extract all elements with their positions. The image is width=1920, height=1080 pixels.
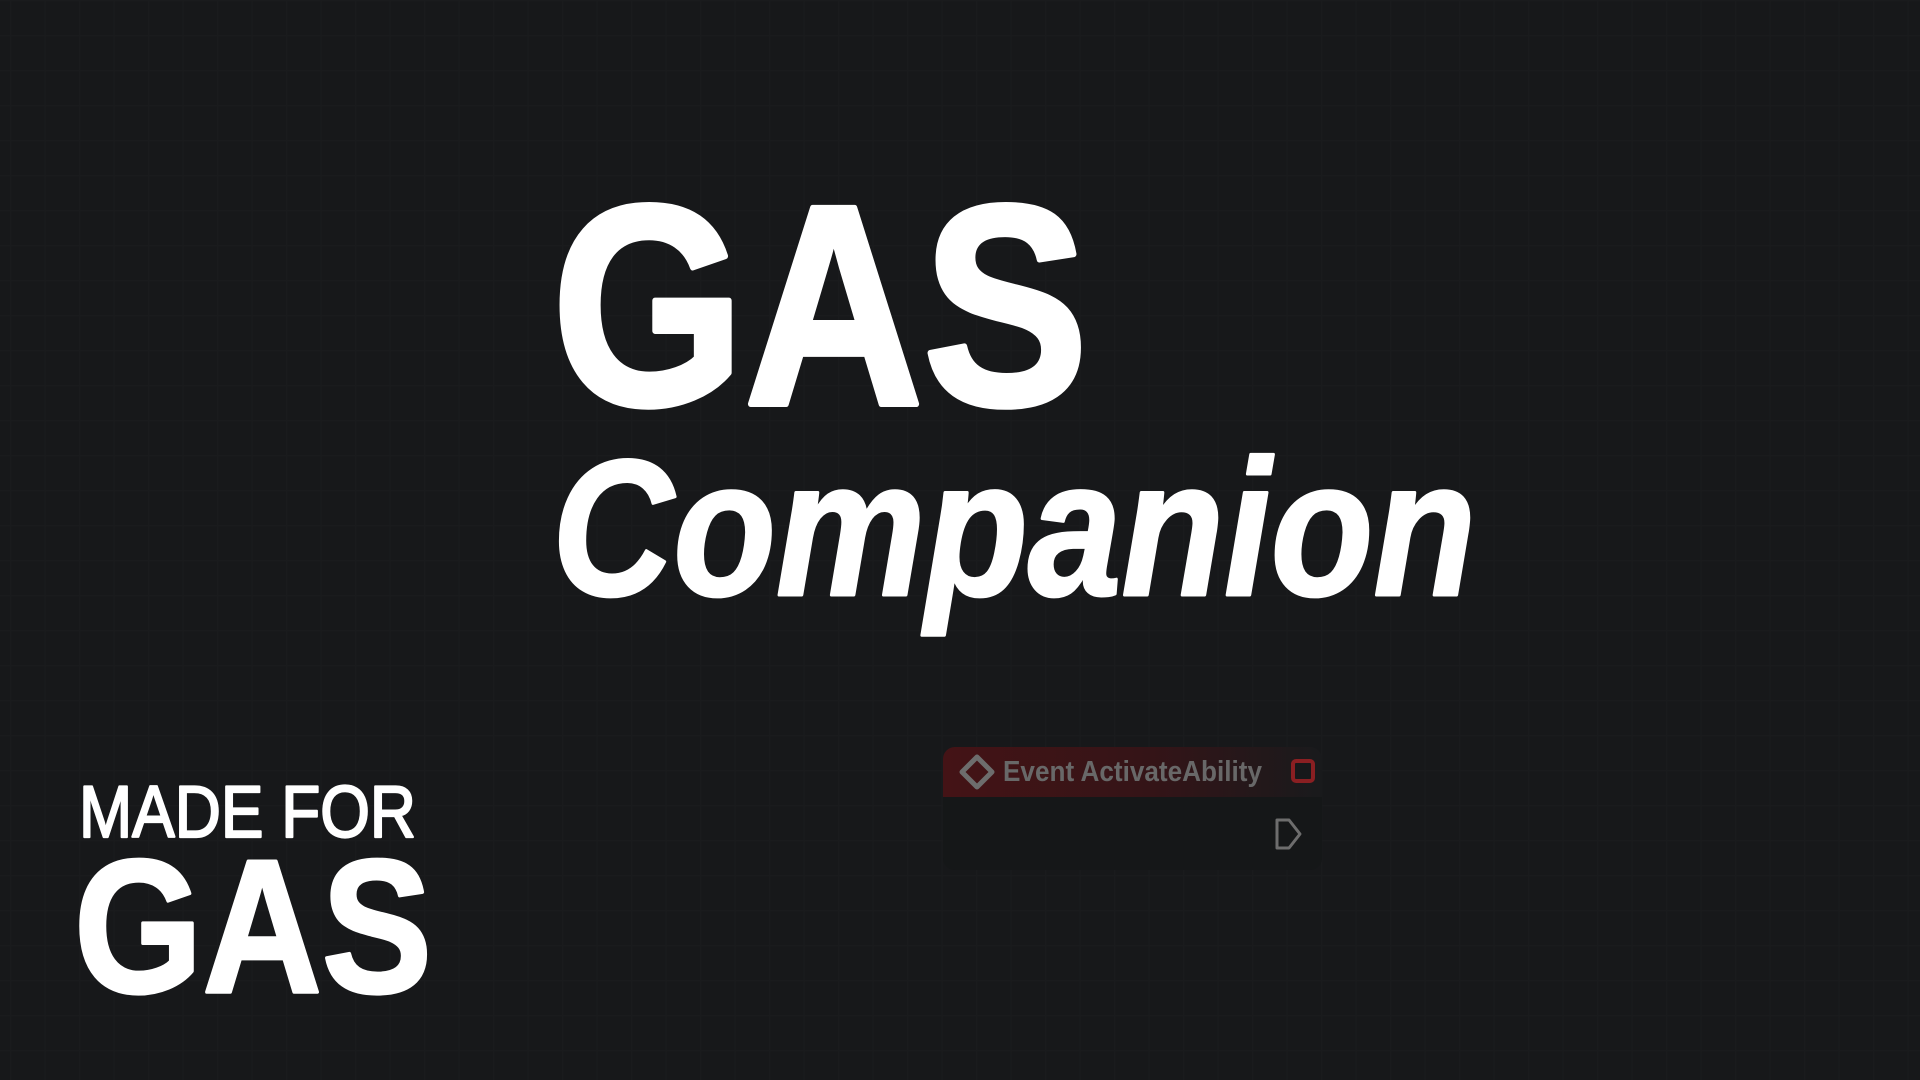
badge line: GAS: GAS [74, 821, 432, 1033]
subtitle: Companion: Companion [552, 420, 1476, 637]
node header [943, 747, 1322, 797]
title: GAS: GAS [552, 147, 1088, 465]
node title: Event ActivateAbility [1003, 756, 1262, 788]
badge: made for GAS [74, 772, 432, 1033]
exec output pin [1277, 820, 1300, 848]
blueprint node: Event ActivateAbility [943, 747, 1322, 870]
delegate pin [1293, 761, 1313, 781]
node body [943, 797, 1322, 870]
badge line: MADE FOR: MADE FOR [79, 772, 416, 853]
icon: event diamond [962, 757, 992, 787]
